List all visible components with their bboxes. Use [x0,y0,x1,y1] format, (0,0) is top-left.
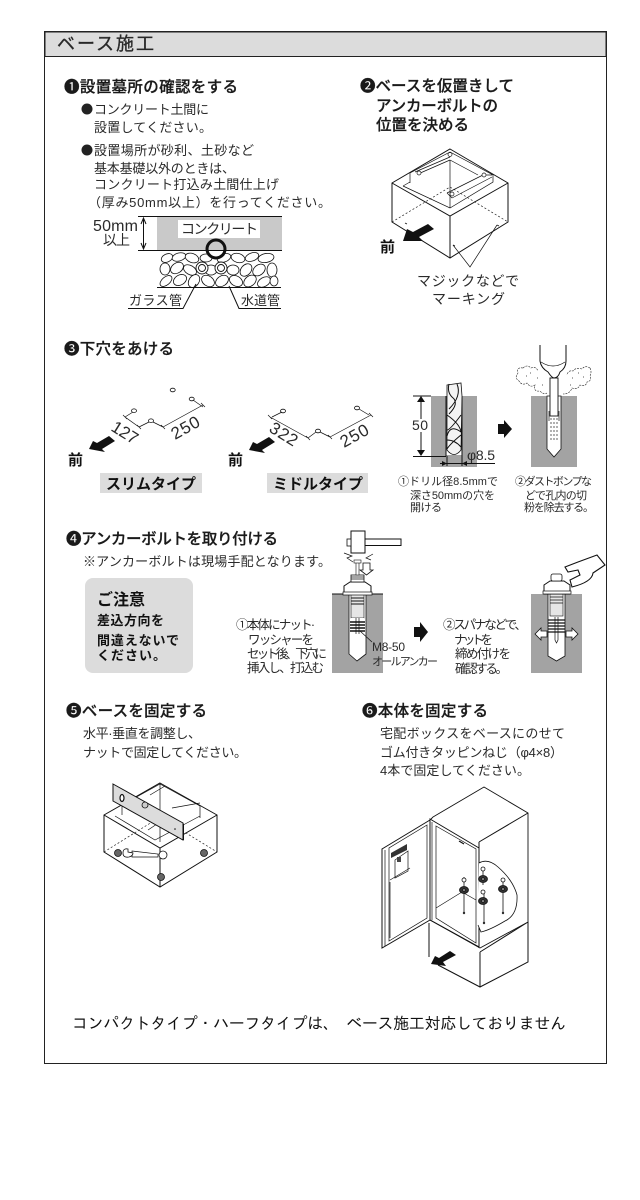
middle type layout: 250 [337,420,372,451]
hammer [347,531,401,553]
dust pump diagram [516,345,591,467]
anchor label: M8-50 [372,640,405,654]
panel: step 3 [64,340,594,514]
anchor tightening diagram [531,555,605,673]
panel: step 1 [64,78,331,308]
cutaway bubble [478,861,517,932]
pipes [196,262,227,274]
panel: step 4 [66,530,605,676]
marking leader lines [453,225,497,267]
dust pump caption: 粉を除去する。 [524,500,594,514]
box body [430,787,528,948]
glass pipe label [128,284,196,308]
slim type layout [68,388,205,469]
dust pump caption [515,474,594,514]
caution box: ください。 [97,648,166,663]
middle type label: ミドルタイプ [273,476,363,493]
middle type layout: 322 [266,418,301,450]
base box diagram [392,149,508,258]
concrete section diagram [93,216,282,308]
drill caption: 開ける [410,501,442,514]
dimension 50: 50 [412,417,428,433]
step 2 heading [360,77,514,134]
outer frame panel [44,32,606,1064]
step 4 caption 1 [236,618,327,675]
step 1 text block: コンクリート土間に [94,102,209,117]
step 4 caption 2: ナットを [454,633,493,647]
step 6 text: 宅配ボックスをベースにのせて [380,726,565,741]
mailbox on base diagram [382,787,528,987]
dimension: 50mm or more: 50mm [93,218,138,235]
step 1 heading: ❶設置墓所の確認をする [64,78,238,96]
arrow [414,622,428,642]
door [382,820,430,948]
base with level diagram [104,783,217,887]
step 5 text [83,726,247,760]
front arrow [403,224,434,241]
step 5 heading: ❺ベースを固定する [66,702,207,720]
step 5 text: ナットで固定してください。 [83,745,247,760]
expansion arrows [535,628,547,640]
dimension: 50mm or more: 以上 [103,232,130,248]
footer note: コンパクトタイプ・ハーフタイプは、 ベース施工対応しておりません [72,1015,566,1031]
drill caption [398,475,498,514]
step 4 caption 1: ワッシャーを [248,633,314,647]
dust pump caption: どで孔内の切 [525,488,587,502]
step 1 text block: 設置してください。 [94,120,212,135]
highlight ring [207,240,225,258]
step 4 caption 2: ②スパナなどで、 [443,618,527,632]
marking points [405,223,499,246]
slim type label: スリムタイプ [106,476,196,493]
front label: 前 [380,238,395,256]
panel: step 2 [360,77,519,307]
level tool [113,784,184,840]
step 4 caption 1: ①本体にナット· [236,618,315,632]
arrow [498,420,512,438]
step 1 text block: （厚み50mm以上）を行ってください。 [88,195,331,210]
anchor hammering diagram [332,531,401,673]
step 1 text block: 設置場所が砂利、土砂など [94,143,254,158]
drill caption: ①ドリル径8.5mmで [398,475,498,488]
water pipe label [229,286,281,308]
caution box: 差込方向を [97,613,164,628]
step 6 heading: ❻本体を固定する [362,702,488,720]
marking label [417,273,519,307]
middle type layout: 前 [228,451,243,469]
step 6 text: ゴム付きタッピンねじ（φ4×8） [380,745,563,760]
drill diagram [412,383,495,467]
concrete label: コンクリート [181,221,258,237]
title: ベース施工 [57,34,154,54]
panel: step 6 [362,702,565,987]
drill caption: 深さ50mmの穴を [410,489,495,502]
header band [45,32,606,56]
step 2 heading: アンカーボルトの [376,97,498,115]
step 1 text block: 基本基礎以外のときは、 [94,161,235,176]
note line: ※アンカーボルトは現場手配となります。 [83,554,331,569]
caution box: 間違えないで [97,633,179,648]
wrench [565,555,605,587]
step 3 heading: ❸下穴をあける [64,340,174,358]
screws [460,867,508,924]
step 4 caption 1: セット後、下穴に [247,647,327,661]
step 1 text block: コンクリート打込み土間仕上げ [94,177,279,192]
base block [438,922,528,987]
step 4 caption 2: 締め付けを [455,647,511,661]
slim type layout: 前 [68,451,83,469]
step 2 heading: 位置を決める [376,116,469,134]
gravel layer [158,251,278,290]
panel: step 5 [66,702,247,887]
water pipe label: 水道管 [241,293,280,308]
glass pipe label: ガラス管 [129,293,182,308]
step 5 text: 水平·垂直を調整し、 [83,726,201,741]
caution box [85,578,193,673]
front arrow [431,951,456,966]
dust pump caption: ②ダストボンプな [515,474,592,488]
step 2 heading: ❷ベースを仮置きして [360,77,514,95]
step 6 text [380,726,565,778]
step 4 caption 1: 挿入し、打込む [247,660,324,675]
impact marks [344,553,373,562]
dust clouds [516,366,591,394]
marking label: マジックなどで [417,273,519,289]
slim type layout: 250 [168,412,203,443]
dimension: 50mm or more [93,218,146,249]
step 4 caption 2 [443,618,527,676]
down arrow [360,563,373,575]
middle type layout [228,406,373,469]
step 1 text block [82,102,331,210]
dimension phi 8.5: φ8.5 [467,447,495,463]
step 4 heading: ❹アンカーボルトを取り付ける [66,530,278,548]
slim type layout: 127 [108,417,142,448]
wrench and nuts [114,849,208,880]
step 6 text: 4本で固定してください。 [380,763,530,778]
anchor label: オールアンカー [372,655,438,668]
step 4 caption 2: 確認する。 [455,661,508,676]
caution box: ご注意 [97,590,145,609]
opening [430,819,479,947]
marking label: マーキング [432,291,505,307]
anchor label [372,640,438,668]
